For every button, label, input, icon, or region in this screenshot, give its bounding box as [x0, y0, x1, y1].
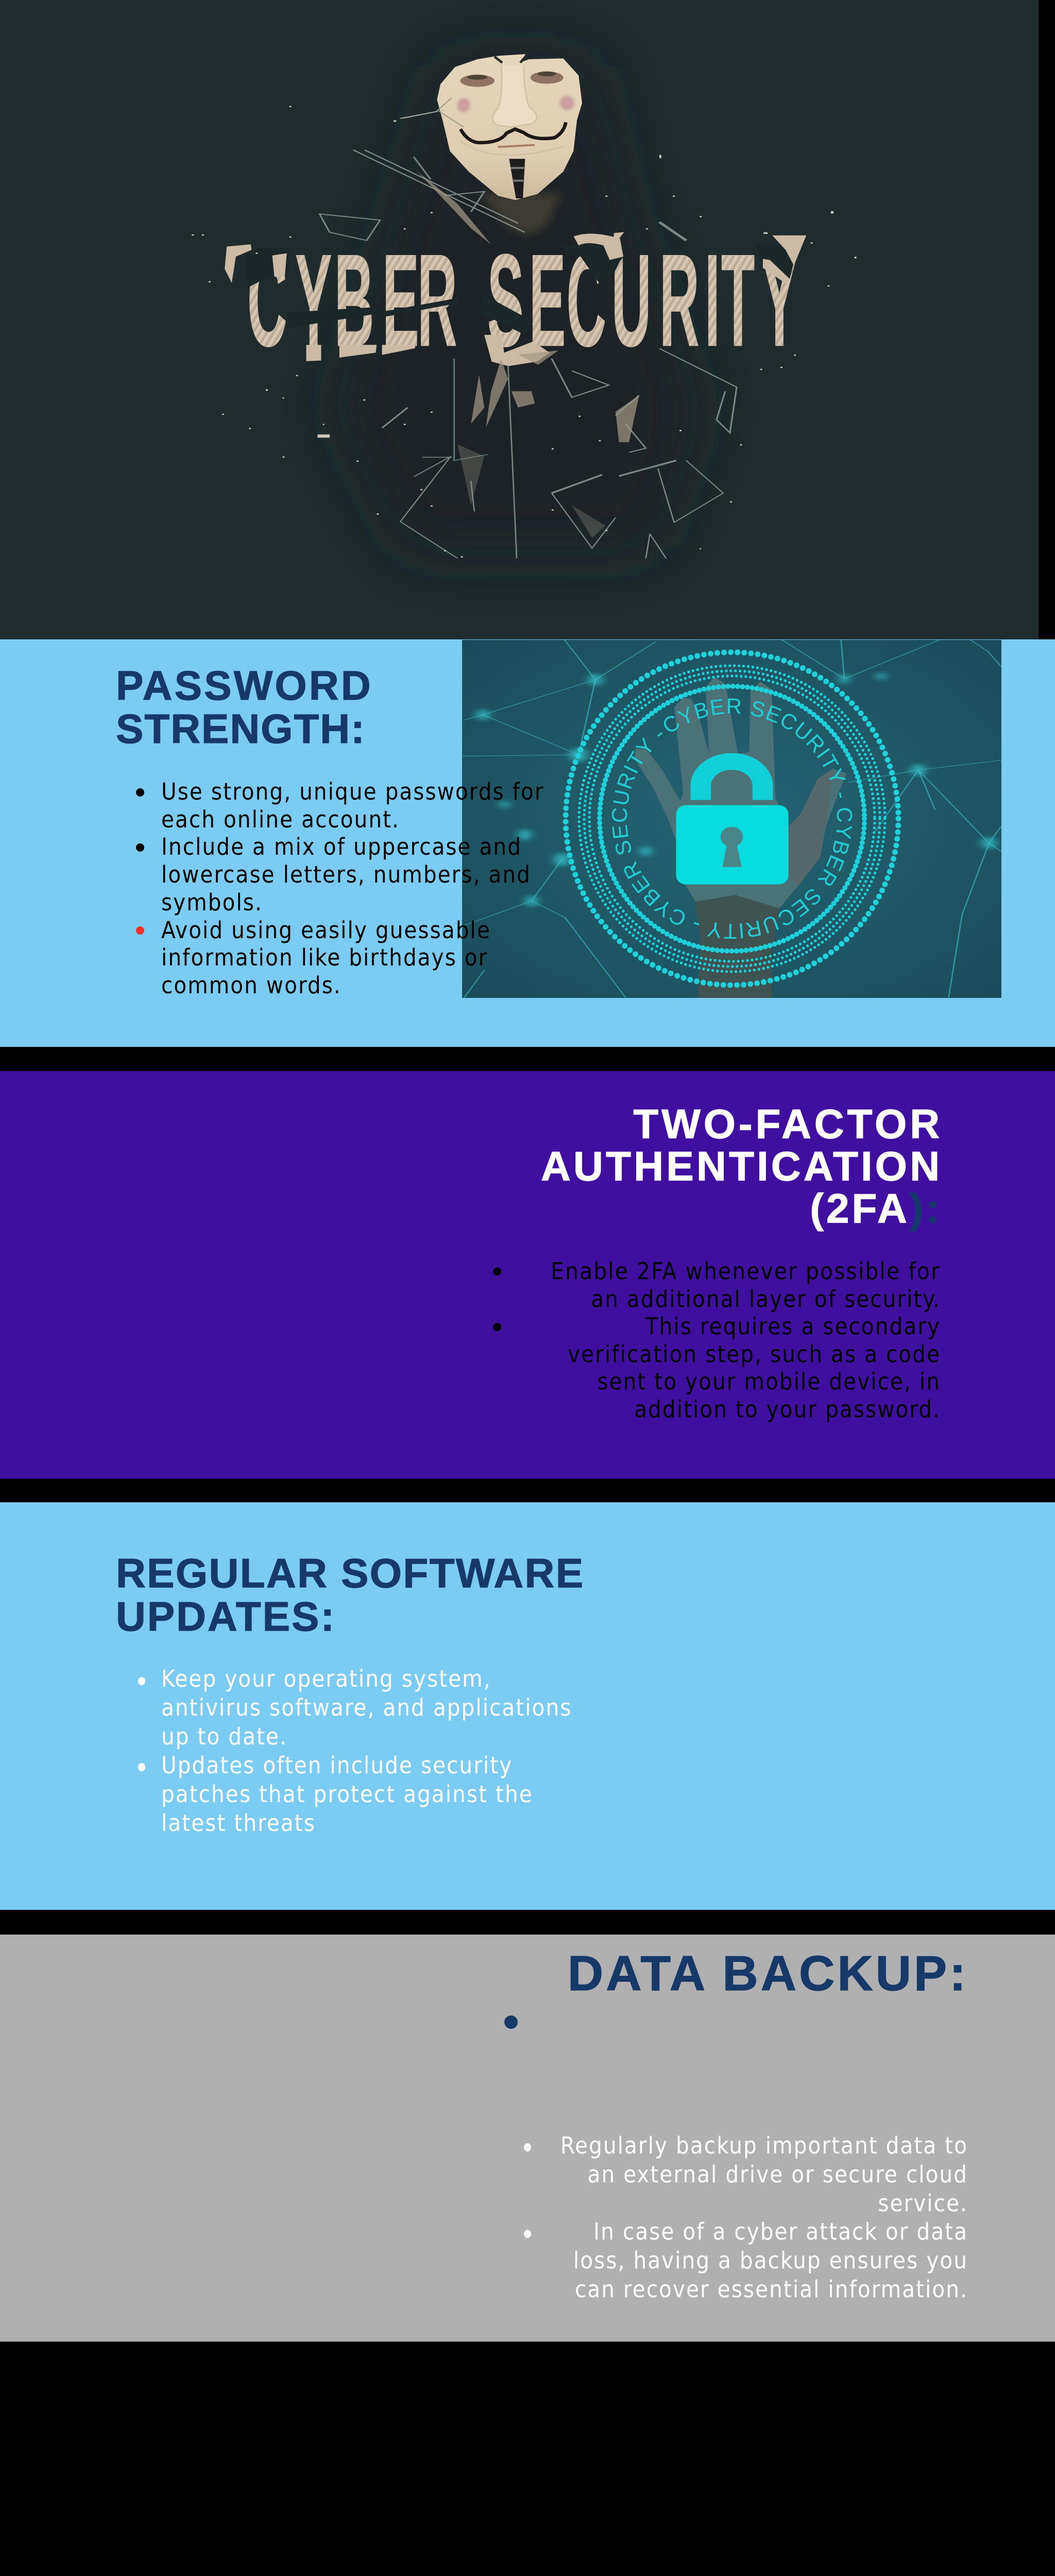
- list: 2FA tips: sent to your mobile device, in: [597, 1368, 941, 1395]
- displaced letter fragments: [225, 232, 806, 366]
- central glass debris: [192, 106, 857, 557]
- list: update tips: latest threats: [161, 1809, 316, 1837]
- lock and hand image: [462, 640, 1001, 998]
- mask face: [400, 54, 582, 200]
- moustache: [461, 122, 566, 143]
- list: 2FA tips: Enable 2FA whenever possible for: [551, 1258, 941, 1285]
- list: 2FA tips: an additional layer of security.: [591, 1285, 941, 1313]
- hero image: cyber security mask and shattered glass: [0, 0, 1039, 639]
- list: password tips: Include a mix of uppercase and: [161, 833, 522, 860]
- panel: password strength: [0, 639, 1055, 1047]
- list: update tips: patches that protect against the: [161, 1781, 533, 1808]
- lip: [498, 145, 535, 147]
- list: update tips: up to date.: [161, 1723, 287, 1750]
- list: update tips: [138, 1665, 572, 1837]
- heading: two-factor authentication: TWO-FACTOR: [633, 1101, 943, 1147]
- hooded figure silhouette: [340, 67, 695, 546]
- panel: regular software updates: [0, 1502, 1055, 1910]
- list: 2FA tips: verification step, such as a code: [568, 1341, 941, 1368]
- list: backup tips: can recover essential information.: [575, 2276, 968, 2303]
- heading: password strength: STRENGTH:: [116, 706, 366, 752]
- cheeks: [457, 98, 470, 112]
- heading: regular software updates: REGULAR SOFTWARE: [116, 1550, 584, 1596]
- network lines: [463, 639, 1001, 997]
- heading: regular software updates: [116, 1550, 584, 1639]
- list: password tips: lowercase letters, numbers, and: [161, 861, 531, 888]
- list: 2FA tips: This requires a secondary: [645, 1313, 941, 1340]
- padlock: [676, 753, 789, 885]
- list: password tips: Use strong, unique passwords for: [161, 778, 544, 805]
- dotted rings: [566, 652, 898, 985]
- list: backup tips: loss, having a backup ensures you: [573, 2247, 968, 2274]
- nose: [493, 65, 537, 127]
- list: update tips: antivirus software, and applications: [161, 1694, 572, 1721]
- list: password tips: Avoid using easily guessable: [161, 916, 491, 944]
- list: password tips: common words.: [161, 972, 342, 999]
- title: CYBER SECURITY: CYBER SECURITY: [247, 228, 798, 374]
- list: password tips: information like birthdays or: [161, 944, 488, 971]
- list: backup tips: [524, 2132, 968, 2303]
- list: update tips: Updates often include security: [161, 1752, 513, 1779]
- heading: two-factor authentication: (2FA):: [810, 1185, 942, 1231]
- shattered glass shards: [319, 110, 737, 558]
- heading: two-factor authentication: AUTHENTICATION: [541, 1143, 942, 1189]
- panel: two-factor authentication: [0, 1071, 1055, 1479]
- empty navy bullet: [504, 2015, 518, 2029]
- heading: regular software updates: UPDATES:: [116, 1594, 336, 1639]
- panel: data backup: [0, 1935, 1055, 2342]
- heading: password strength: PASSWORD: [116, 663, 373, 708]
- heading: two-factor authentication: [541, 1101, 943, 1231]
- hand: [634, 677, 846, 998]
- list: password tips: [136, 778, 544, 999]
- network nodes: [477, 672, 996, 907]
- list: 2FA tips: addition to your password.: [634, 1396, 941, 1423]
- list: backup tips: In case of a cyber attack or data: [593, 2218, 968, 2245]
- heading: password strength: [116, 663, 373, 752]
- list: 2FA tips: [493, 1258, 941, 1423]
- circular caption: CYBER SECURITY - CYBER SECURITY - CYBER SECURITY -: [612, 699, 852, 939]
- list: backup tips: Regularly backup important data to: [560, 2132, 968, 2159]
- goatee: [509, 159, 525, 198]
- eyes: [460, 75, 495, 87]
- list: password tips: symbols.: [161, 889, 263, 916]
- list: backup tips: an external drive or secure cloud: [588, 2161, 968, 2188]
- list: update tips: Keep your operating system,: [161, 1665, 491, 1692]
- neck shadow under mask: [479, 193, 561, 236]
- shatter cuts through title: [225, 232, 806, 366]
- list: password tips: each online account.: [161, 806, 400, 833]
- heading: data backup: DATA BACKUP:: [568, 1946, 968, 2001]
- list: backup tips: service.: [878, 2190, 968, 2217]
